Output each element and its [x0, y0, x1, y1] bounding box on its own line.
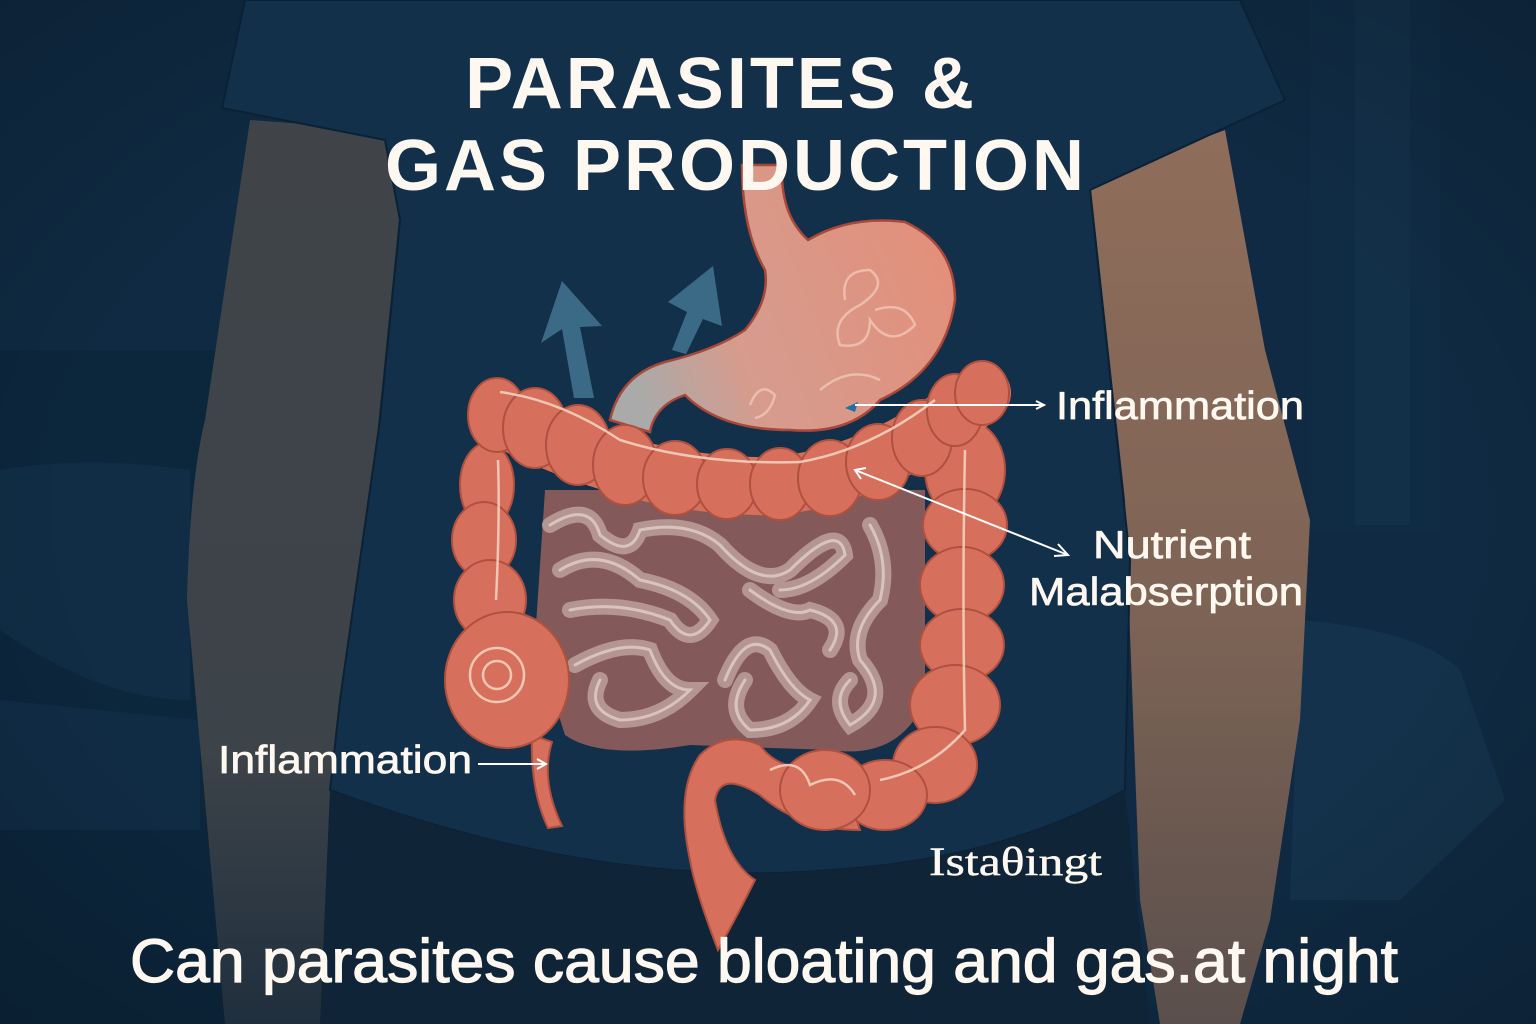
descending colon lobes [925, 420, 1005, 520]
transverse colon underlay [497, 393, 982, 486]
rectum and sigmoid [684, 739, 860, 950]
appendix [532, 735, 562, 828]
label: inflammation right: Inflammation [1056, 385, 1304, 428]
callout arrows [478, 401, 1068, 769]
gas arrows [541, 266, 722, 398]
title: PARASITES & [465, 44, 977, 124]
label: inflammation left: Inflammation [218, 739, 472, 782]
t-shirt [222, 0, 1285, 873]
title [385, 44, 1087, 206]
title: GAS PRODUCTION [385, 126, 1087, 206]
colon highlights [470, 392, 965, 795]
right arm [1090, 130, 1310, 1024]
small intestine [535, 490, 925, 751]
label: nutrient malabsorption: Nutrient [1093, 524, 1251, 567]
stomach [610, 165, 955, 432]
watermark logo text: Istaθingt [929, 839, 1102, 884]
left arm [187, 120, 400, 1024]
trousers [320, 790, 1150, 1024]
label: nutrient malabsorption: Malabserption [1029, 571, 1303, 614]
transverse colon lobes [468, 378, 526, 452]
label: nutrient malabsorption [1029, 524, 1303, 614]
subtitle: Can parasites cause bloating and gas.at night [130, 927, 1398, 995]
large intestine [445, 361, 1009, 950]
ascending colon lobes [460, 443, 514, 527]
